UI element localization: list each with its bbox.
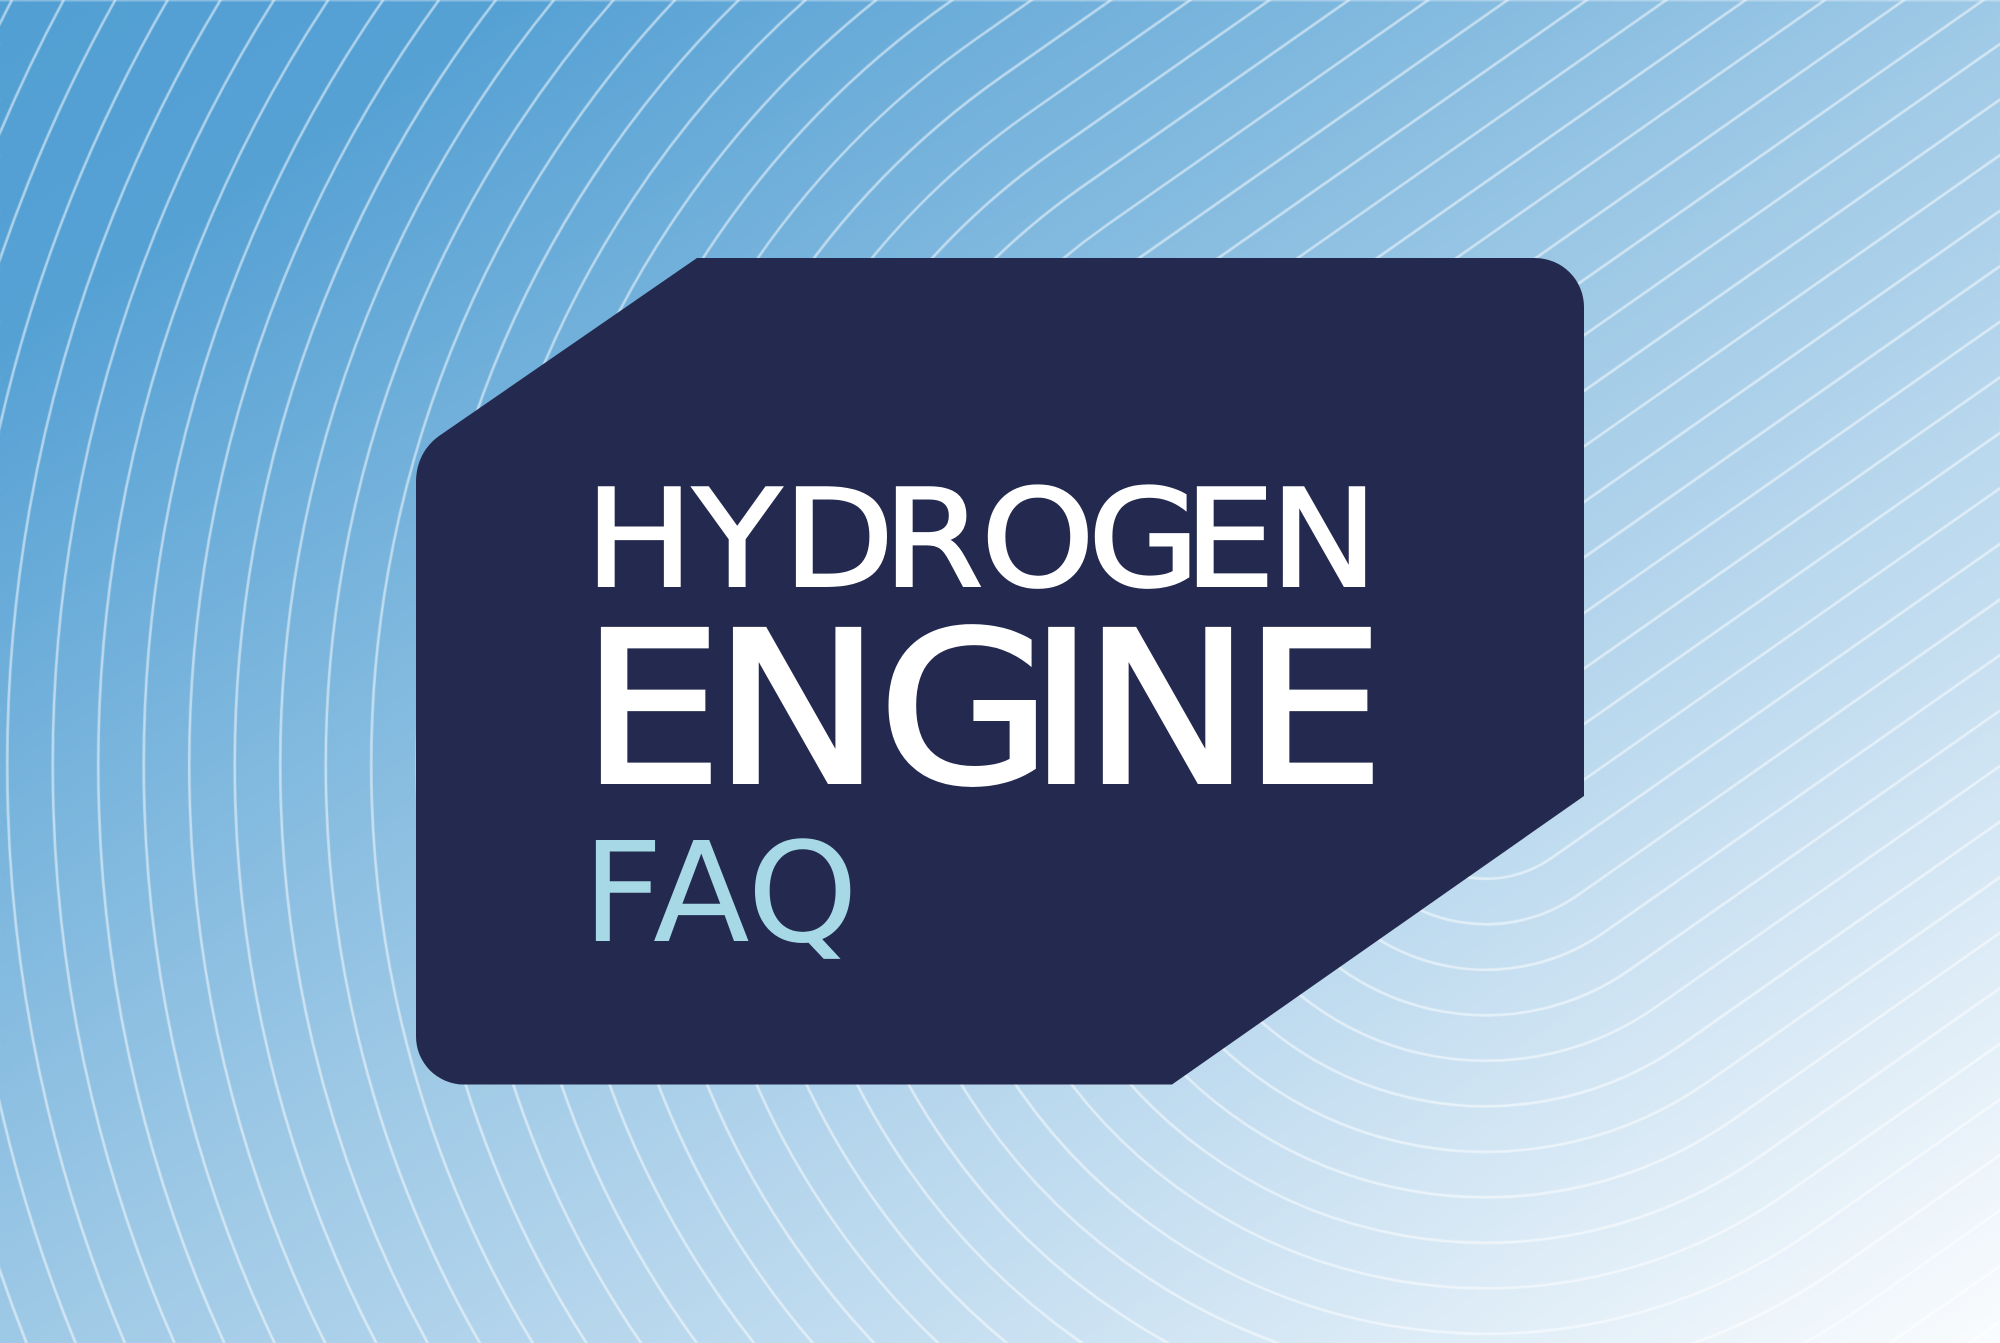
subtitle: FAQ: FAQ	[582, 812, 858, 974]
panel: dark navy title card	[416, 258, 1584, 1084]
title: ENGINE: ENGINE	[581, 588, 1385, 832]
title: HYDROGEN: HYDROGEN	[585, 460, 1378, 618]
